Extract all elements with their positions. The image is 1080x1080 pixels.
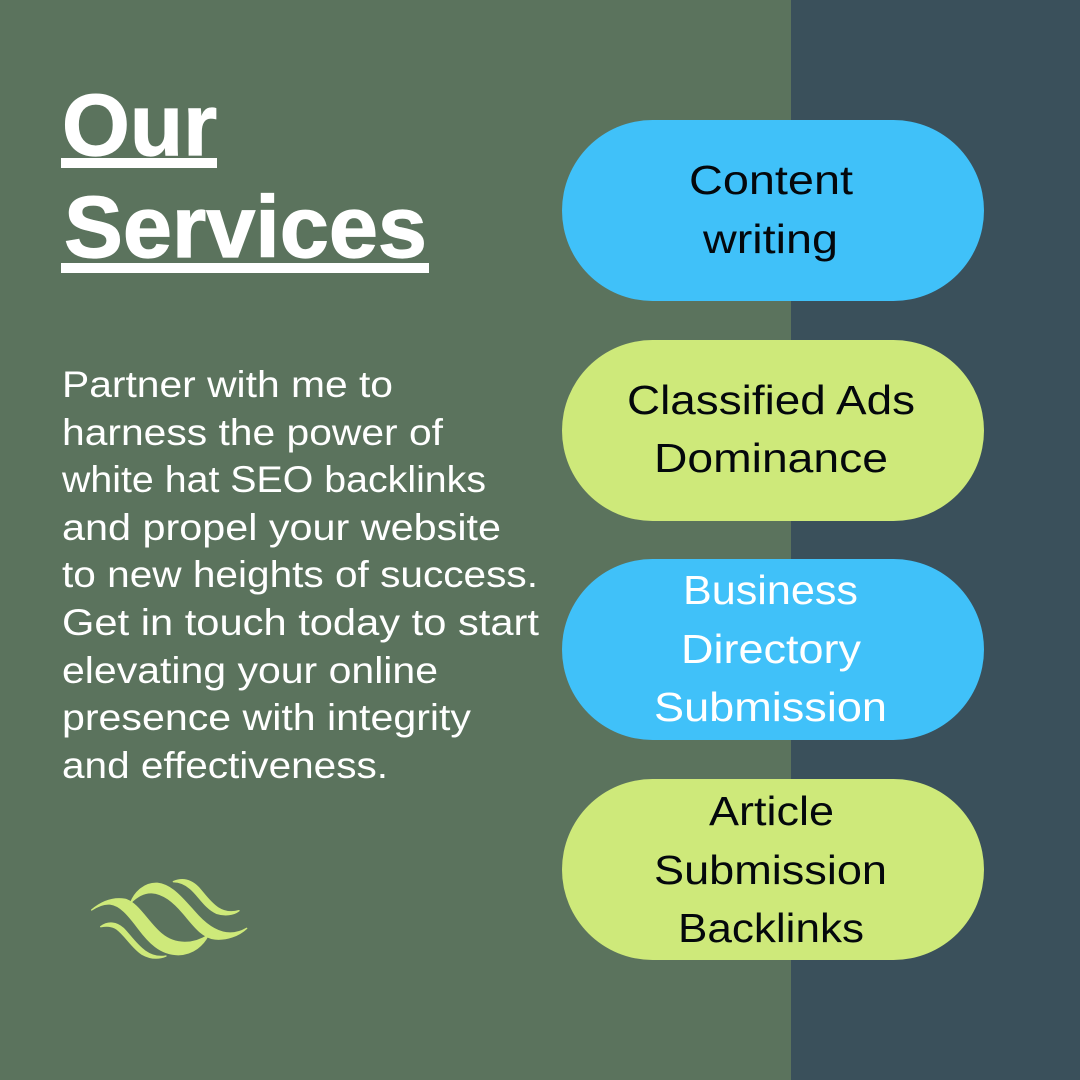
panel: green background xyxy=(0,0,791,1080)
text block: description: and effectiveness. xyxy=(62,744,388,786)
pill: Classified Ads Dominance: Dominance xyxy=(654,435,888,481)
text block: description: to new heights of success. xyxy=(62,553,538,595)
text block: description: harness the power of xyxy=(62,411,444,453)
title: Our Services: Services xyxy=(64,179,427,276)
pill: Business Directory Submission: Directory xyxy=(681,626,862,672)
pill: Content writing xyxy=(562,120,984,301)
pill: Article Submission Backlinks xyxy=(562,779,984,960)
text block: description: white hat SEO backlinks xyxy=(61,458,486,500)
text block: description: Partner with me to xyxy=(62,363,393,405)
pill: Business Directory Submission: Business xyxy=(683,567,858,613)
text block: description: presence with integrity xyxy=(62,696,471,738)
text block: description: elevating your online xyxy=(62,649,438,691)
pill: Content writing: Content xyxy=(689,157,854,203)
pill: Classified Ads Dominance: Classified Ads xyxy=(627,377,915,423)
text block: description: and propel your website xyxy=(62,506,501,548)
pill: Classified Ads Dominance xyxy=(562,340,984,521)
pill: Content writing: writing xyxy=(702,216,838,262)
icon: wave logo xyxy=(92,880,247,958)
title: Our Services xyxy=(61,77,429,276)
pill: Business Directory Submission: Submission xyxy=(654,684,887,730)
title: Our Services: Our xyxy=(62,77,217,174)
pill: Article Submission Backlinks: Submission xyxy=(654,847,887,893)
text block: description xyxy=(61,363,540,786)
panel: dark slate right column xyxy=(791,0,1080,1080)
text block: description: Get in touch today to start xyxy=(62,601,540,643)
pill: Article Submission Backlinks: Article xyxy=(709,788,834,834)
pill: Business Directory Submission xyxy=(562,559,984,740)
pill: Article Submission Backlinks: Backlinks xyxy=(678,905,864,951)
